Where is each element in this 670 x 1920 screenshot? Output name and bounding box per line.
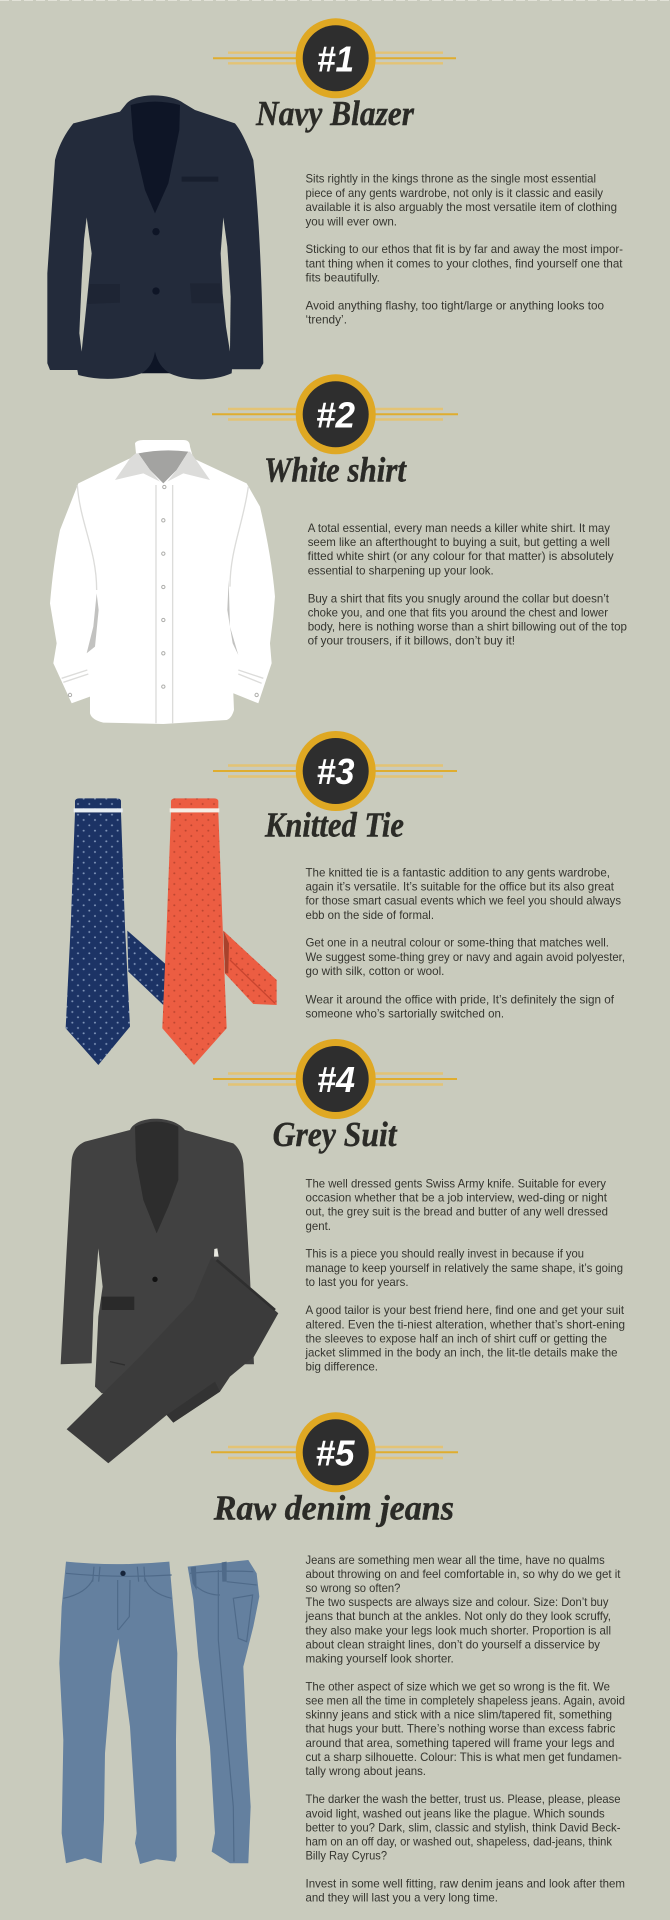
text block 3: again it’s versatile. It’s suitable for the office but its also great bbox=[306, 881, 615, 894]
illustration: white shirt bbox=[50, 440, 275, 724]
badge 4: #4 bbox=[317, 1059, 355, 1100]
text block 4: occasion whether that be a job interview, wed-ding or night bbox=[306, 1192, 608, 1205]
text block 4: manage to keep yourself in relatively the same shape, it’s going bbox=[306, 1262, 623, 1275]
section 4: grey suit bbox=[61, 1039, 625, 1463]
text block 3: for those smart casual events which we feel you should always bbox=[306, 895, 621, 908]
text block 5: The darker the wash the better, trust us. Please, please, please bbox=[306, 1793, 620, 1806]
heading: Navy Blazer: Navy Blazer bbox=[255, 94, 414, 133]
text block 5: Billy Ray Cyrus? bbox=[306, 1849, 388, 1862]
text block 5: see men all the time in completely shapeless jeans. Again, avoid bbox=[306, 1695, 625, 1708]
text block 5: making yourself look shorter. bbox=[306, 1653, 454, 1666]
text block 2 bbox=[308, 522, 627, 648]
badge 3 bbox=[213, 731, 457, 811]
text block 5: cut a sharp silhouette. Colour: This is what men get fundamen- bbox=[306, 1751, 622, 1764]
text block 5: about clean straight lines, don’t do yourself a disservice by bbox=[306, 1638, 600, 1651]
badge 2: #2 bbox=[316, 394, 355, 436]
text block 5: avoid light, washed out jeans like the plague. Which sounds bbox=[306, 1807, 605, 1820]
text block 2: of your trousers, if it billows, don’t buy it! bbox=[308, 635, 515, 648]
text block 1: tant thing when it comes to your clothes, find yourself one that bbox=[306, 257, 623, 270]
text block 5: better to you? Dark, slim, classic and stylish, think David Beck- bbox=[306, 1821, 621, 1834]
text block 5: Jeans are something men wear all the time, have no qualms bbox=[306, 1554, 605, 1567]
section 2: white shirt bbox=[50, 374, 627, 724]
text block 5: ham on an off day, or washed out, shapeless, dad-jeans, think bbox=[306, 1835, 612, 1848]
text block 2: essential to sharpening up your look. bbox=[308, 564, 494, 577]
text block 5: around that area, something tapered will frame your legs and bbox=[306, 1737, 614, 1750]
text block 4: to last you for years. bbox=[306, 1276, 408, 1289]
text block 2: choke you, and one that fits you around the chest and lower bbox=[308, 607, 608, 620]
text block 4: This is a piece you should really invest in because if you bbox=[306, 1248, 584, 1261]
illustration: grey suit bbox=[61, 1119, 278, 1463]
badge 3: #3 bbox=[316, 751, 354, 792]
text block 1: Sticking to our ethos that fit is by far and away the most impor- bbox=[306, 243, 623, 256]
section 3: knitted tie bbox=[66, 731, 625, 1065]
text block 5: so wrong so often? bbox=[306, 1582, 401, 1595]
text block 5: The other aspect of size which we get so wrong is the fit. We bbox=[306, 1681, 610, 1694]
heading: Raw denim jeans: Raw denim jeans bbox=[213, 1488, 454, 1527]
text block 5: Invest in some well fitting, raw denim jeans and look after them bbox=[306, 1878, 625, 1891]
text block 3: Get one in a neutral colour or some-thing that matches well. bbox=[306, 937, 609, 950]
heading: Grey Suit: Grey Suit bbox=[273, 1115, 398, 1154]
text block 1: available it is also arguably the most versatile item of clothing bbox=[306, 201, 617, 214]
text block 2: seem like an afterthought to buying a suit, but getting a well bbox=[308, 536, 610, 549]
text block 4: big difference. bbox=[306, 1360, 378, 1373]
text block 1: Avoid anything flashy, too tight/large or anything looks too bbox=[306, 299, 604, 312]
text block 3: go with silk, cotton or wool. bbox=[306, 965, 444, 978]
text block 5: The two suspects are always size and colour. Size: Don’t buy bbox=[306, 1596, 609, 1609]
text block 2: Buy a shirt that fits you snugly around the collar but doesn’t bbox=[308, 593, 610, 606]
text block 3: Wear it around the office with pride, It’s definitely the sign of bbox=[306, 993, 615, 1006]
illustration: jeans bbox=[59, 1560, 259, 1864]
text block 2: body, here is nothing worse than a shirt billowing out of the top bbox=[308, 621, 627, 634]
text block 4: out, the grey suit is the bread and butter of any well dressed bbox=[306, 1206, 608, 1219]
badge 5 bbox=[211, 1412, 458, 1492]
badge 1: #1 bbox=[317, 38, 354, 80]
badge 5: #5 bbox=[316, 1432, 355, 1474]
badge 1 bbox=[213, 18, 456, 98]
text block 3 bbox=[306, 867, 625, 1020]
text block 5: skinny jeans and stick with a nice slim/tapered fit, something bbox=[306, 1709, 612, 1722]
section 1: navy blazer bbox=[47, 18, 623, 379]
text block 4: the sleeves to expose half an inch of shirt cuff or getting the bbox=[306, 1332, 607, 1345]
text block 1: fits beautifully. bbox=[306, 271, 380, 284]
text block 2: A total essential, every man needs a killer white shirt. It may bbox=[308, 522, 610, 535]
text block 1: Sits rightly in the kings throne as the single most essential bbox=[306, 173, 596, 186]
text block 3: ebb on the side of formal. bbox=[306, 909, 434, 922]
text block 4: The well dressed gents Swiss Army knife. Suitable for every bbox=[306, 1178, 606, 1191]
text block 5: jeans that bunch at the ankles. Not only do they look scruffy, bbox=[305, 1610, 611, 1623]
badge 2 bbox=[212, 374, 458, 454]
text block 3: someone who’s sartorially switched on. bbox=[306, 1007, 504, 1020]
text block 3: The knitted tie is a fantastic addition to any gents wardrobe, bbox=[306, 867, 610, 880]
text block 1 bbox=[306, 173, 623, 327]
badge 4 bbox=[213, 1039, 457, 1119]
section 5: raw denim jeans bbox=[59, 1412, 625, 1905]
text block 5: they also make your legs look much shorter. Proportion is all bbox=[306, 1624, 611, 1637]
text block 4 bbox=[305, 1178, 625, 1373]
text block 5: and they will last you a very long time. bbox=[306, 1892, 498, 1905]
text block 1: piece of any gents wardrobe, not only is it classic and easily bbox=[306, 187, 603, 200]
heading: White shirt: White shirt bbox=[264, 451, 407, 490]
text block 2: fitted white shirt (or any colour for that matter) is absolutely bbox=[308, 550, 614, 563]
heading: Knitted Tie: Knitted Tie bbox=[264, 806, 404, 845]
illustration: navy blazer bbox=[47, 95, 263, 379]
text block 4: altered. Even the ti-niest alteration, whether that’s short-ening bbox=[306, 1318, 625, 1331]
text block 5: about throwing on and feel comfortable in, so why do we get it bbox=[306, 1568, 621, 1581]
text block 5 bbox=[305, 1554, 625, 1905]
text block 1: ‘trendy’. bbox=[306, 314, 347, 327]
text block 5: that hugs your butt. There’s nothing worse than excess fabric bbox=[306, 1723, 616, 1736]
text block 4: A good tailor is your best friend here, find one and get your suit bbox=[306, 1304, 625, 1317]
text block 5: tally wrong about jeans. bbox=[306, 1765, 426, 1778]
text block 4: gent. bbox=[306, 1220, 331, 1233]
text block 4: jacket slimmed in the body an inch, the lit-tle details make the bbox=[305, 1346, 618, 1359]
text block 3: We suggest some-thing grey or navy and again avoid polyester, bbox=[306, 951, 625, 964]
illustration: knitted ties bbox=[66, 798, 277, 1065]
text block 1: you will ever own. bbox=[306, 215, 397, 228]
